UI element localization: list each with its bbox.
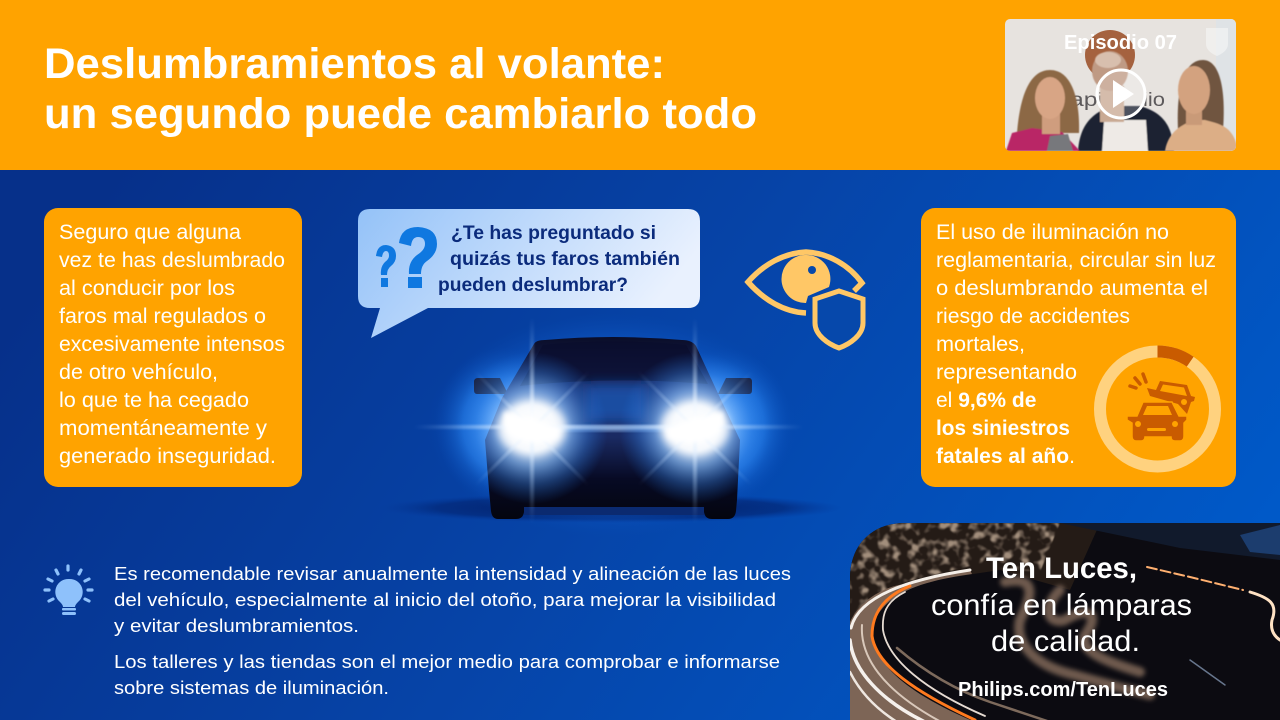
donut chart: 9.6% [1100, 352, 1215, 466]
campaign text [931, 552, 1192, 701]
icon: colliding cars [1127, 374, 1195, 441]
illustration: car with headlights [378, 313, 842, 541]
panel: intro text: faros mal regulados o [59, 305, 266, 328]
header band [0, 0, 1280, 170]
panel: intro text: al conducir por los [59, 277, 235, 300]
panel: intro text: Seguro que alguna [59, 221, 241, 244]
left mirror [474, 378, 508, 394]
wall logo [1085, 30, 1135, 73]
question text [438, 223, 680, 296]
statistic text: El uso de iluminación no [936, 221, 1169, 244]
blue background [0, 170, 1280, 720]
advice text: y evitar deslumbramientos. [114, 615, 359, 636]
advice text: Los talleres y las tiendas son el mejor medio para comprobar e informarse [114, 651, 780, 672]
statistic text: mortales, [936, 333, 1025, 356]
advice text: sobre sistemas de iluminación. [114, 677, 389, 698]
panel: risk statistic [921, 208, 1236, 487]
campaign text: Philips.com/TenLuces [958, 679, 1168, 701]
title: un segundo puede cambiarlo todo [44, 90, 757, 138]
statistic text: riesgo de accidentes [936, 305, 1130, 328]
left headlight [414, 315, 652, 541]
video thumbnail [1005, 19, 1238, 151]
campaign text: de calidad. [991, 625, 1140, 658]
main light trails [850, 570, 1050, 720]
windscreen [520, 342, 708, 386]
panel: intro text: vez te has deslumbrado [59, 249, 285, 272]
panel: intro text: de otro vehículo, [59, 361, 218, 384]
video thumbnail: lio [1143, 90, 1165, 111]
man in centre [1078, 51, 1174, 151]
panel: intro text: generado inseguridad. [59, 445, 276, 468]
light beam between lamps [545, 426, 680, 431]
panel: intro text: lo que te ha cegado [59, 389, 249, 412]
grille glow [587, 384, 645, 422]
title: Deslumbramientos al volante: [44, 40, 665, 88]
distant light trails [1147, 567, 1280, 685]
statistic text [936, 221, 1216, 468]
campaign text: confía en lámparas [931, 589, 1192, 622]
right side halo [652, 347, 792, 503]
statistic text: los siniestros [936, 417, 1070, 440]
statistic text: representando [936, 361, 1077, 384]
speech bubble [358, 209, 700, 338]
left side halo [435, 347, 575, 503]
philips shield [1206, 28, 1228, 56]
ground shadow [378, 493, 842, 523]
advice text: del vehículo, especialmente al inicio del otoño, para mejorar la visibilidad [114, 589, 776, 610]
impact marks [1130, 374, 1146, 388]
panel: intro text [44, 208, 302, 487]
panel: intro text: momentáneamente y [59, 417, 268, 440]
hairpin road trails [1005, 581, 1150, 695]
right headlight [575, 315, 808, 541]
woman on the right [1165, 60, 1238, 151]
question text: quizás tus faros también [450, 249, 680, 270]
hillside [850, 523, 1100, 625]
advice text [114, 563, 791, 698]
woman on the left [1006, 70, 1080, 151]
icon: light bulb [45, 566, 92, 615]
road surface [850, 570, 975, 720]
statistic text: fatales al año. [936, 445, 1075, 468]
car body [485, 337, 740, 519]
statistic text: reglamentaria, circular sin luz [936, 249, 1216, 272]
advice text: Es recomendable revisar anualmente la intensidad y alineación de las luces [114, 563, 791, 584]
campaign text: Ten Luces, [986, 552, 1137, 585]
question text: ¿Te has preguntado si [451, 223, 656, 244]
hillside speckle [850, 523, 1060, 622]
panel: night road photo [850, 523, 1280, 720]
rear car [1147, 381, 1195, 414]
statistic text: o deslumbrando aumenta el [936, 277, 1208, 300]
episode label: Episodio 07 [1064, 32, 1177, 54]
icon: eye with shield [748, 252, 863, 348]
question text: pueden deslumbrar? [438, 275, 628, 296]
headlight halo [427, 313, 797, 537]
panel: intro text: excesivamente intensos [59, 333, 285, 356]
video thumbnail: api [1070, 90, 1103, 111]
play button [1097, 70, 1145, 118]
icon: question marks [376, 227, 437, 288]
title [44, 40, 757, 138]
bumper strip [524, 507, 704, 515]
right mirror [718, 378, 752, 394]
statistic text: el 9,6% de [936, 389, 1036, 412]
front car [1127, 402, 1187, 441]
